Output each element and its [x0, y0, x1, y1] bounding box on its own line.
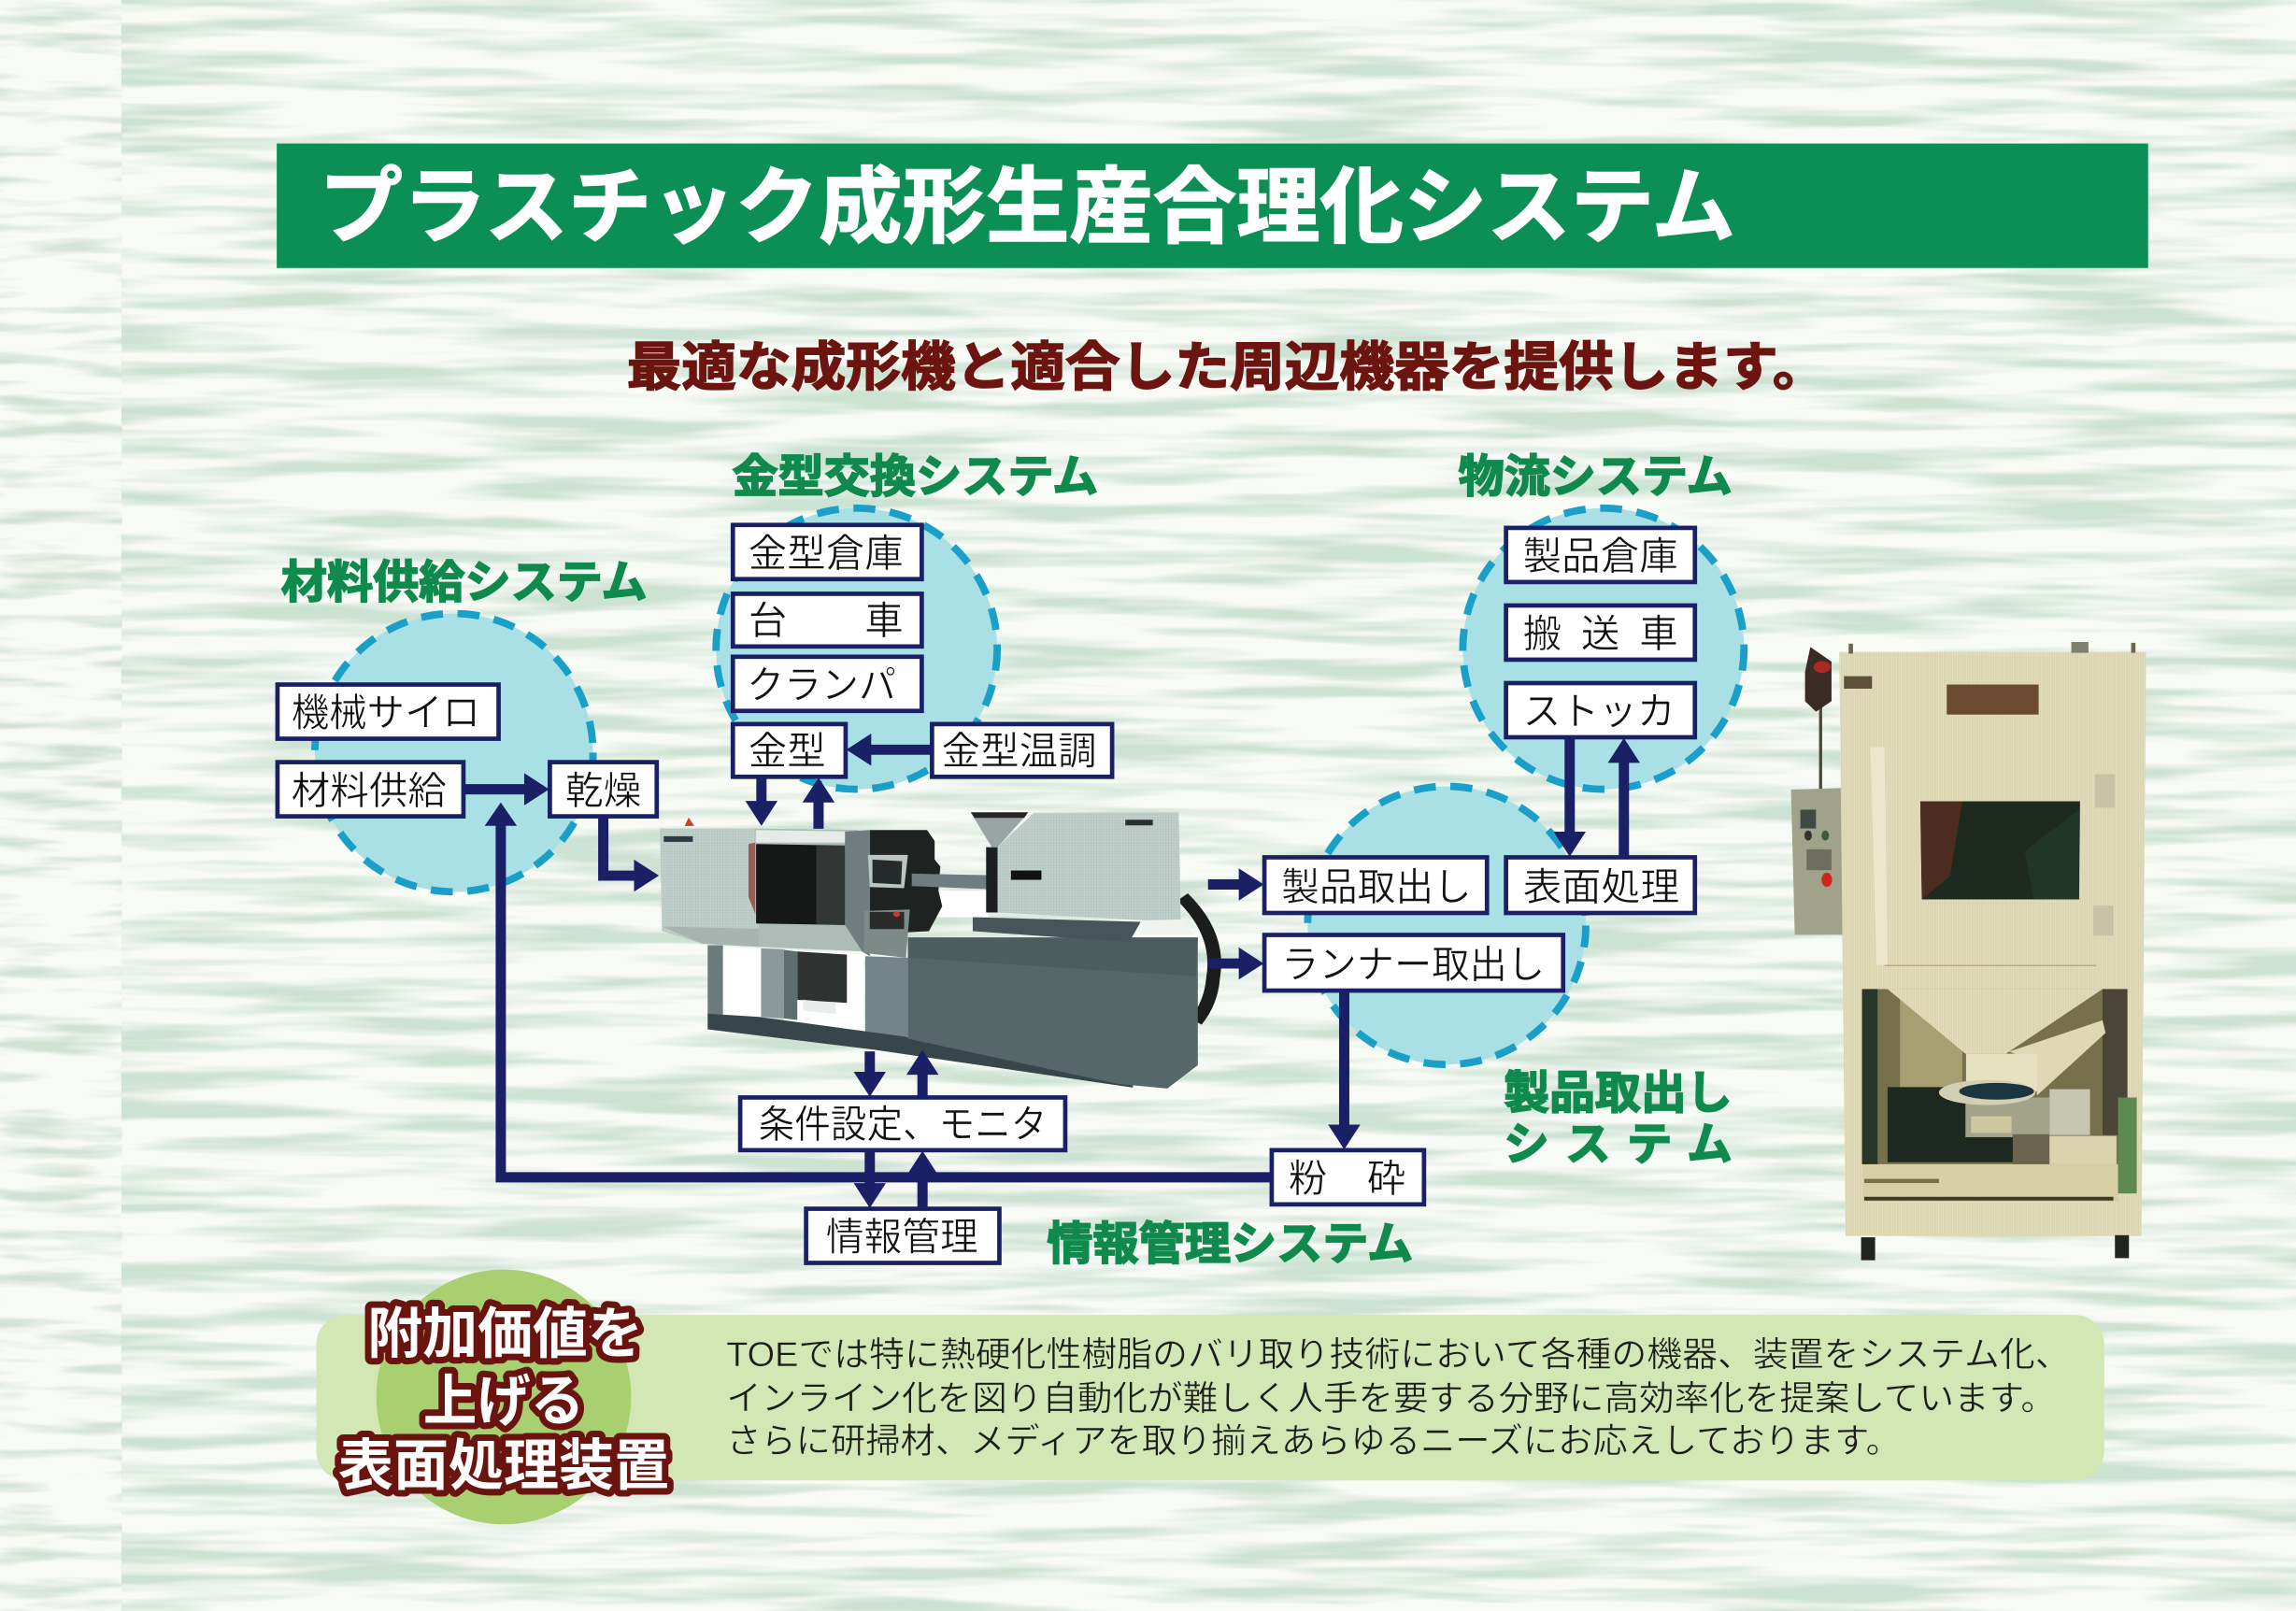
box: 情報管理: 情報管理 [826, 1215, 978, 1259]
box: 情報管理 [806, 1209, 999, 1263]
box: クランパ: クランパ [747, 663, 896, 706]
arrow: machine to runner removal [1208, 948, 1263, 979]
box: 金型 [733, 724, 846, 777]
arrow: material supply to dryer [464, 773, 549, 806]
arrow: mold temperature controller to mold [847, 734, 932, 766]
icon: injection moulding machine photo [660, 812, 1215, 1089]
title bar [277, 144, 2148, 268]
arrow: condition settings to information management [854, 1151, 886, 1208]
box: 表面処理 [1506, 857, 1695, 913]
box: 乾燥: 乾燥 [565, 768, 641, 812]
heading: 金型交換システム: 金型交換システム [732, 452, 1098, 503]
panel: description [316, 1315, 2104, 1480]
box: ストッカ [1506, 683, 1695, 737]
arrow: machine to mold [803, 777, 834, 829]
heading: 製品取出しシステム [1504, 1068, 1733, 1170]
title bar: プラスチック成形生産合理化システム [320, 160, 1735, 253]
callout: 附加価値を上げる表面処理装置: 附加価値を [367, 1303, 643, 1365]
arrow: dryer to machine [604, 817, 659, 891]
arrow: feedback from crusher to material supply [485, 803, 1271, 1177]
box: 条件設定、モニタ: 条件設定、モニタ [759, 1103, 1047, 1147]
arrow: condition settings to machine [906, 1050, 938, 1097]
box: ストッカ: ストッカ [1523, 690, 1676, 734]
text block: description: TOEでは特に熱硬化性樹脂のバリ取り技術において各種の機器、装置をシステム化、 [726, 1335, 2071, 1374]
box: 搬送車: 搬 送 車 [1523, 612, 1678, 656]
circle: material supply [315, 614, 593, 891]
circle: product removal [1307, 786, 1586, 1064]
box: 材料供給 [278, 763, 463, 817]
arrow: machine to product removal [1208, 868, 1263, 901]
subtitle: 最適な成形機と適合した周辺機器を提供します。 [627, 337, 1828, 396]
box: 金型倉庫 [733, 525, 921, 579]
box: 搬送車 [1506, 606, 1695, 660]
box: 台車: 台 車 [749, 599, 904, 643]
callout: 附加価値を上げる表面処理装置: 表面処理装置 [338, 1434, 669, 1497]
box: 製品倉庫 [1506, 528, 1695, 582]
arrow: stocker to surface treatment [1554, 738, 1586, 857]
arrow: information management to condition settings [906, 1151, 938, 1208]
icon: green circle [377, 1270, 631, 1524]
heading: 製品取出しシステム: 製品取出し [1504, 1068, 1733, 1119]
arrow: runner removal to crusher [1328, 991, 1361, 1149]
circle: logistics [1462, 508, 1744, 790]
box: 金型: 金型 [749, 729, 826, 773]
box: 金型温調: 金型温調 [942, 729, 1097, 773]
arrow: surface treatment to stocker [1608, 738, 1640, 857]
box: 製品取出し [1264, 857, 1487, 913]
box: 表面処理: 表面処理 [1523, 865, 1679, 909]
arrow: machine to condition settings [854, 1051, 886, 1097]
box: 台車 [733, 593, 921, 647]
arrow: mold to machine [746, 777, 777, 826]
box: 金型倉庫: 金型倉庫 [749, 531, 904, 575]
heading: 情報管理システム: 情報管理システム [1047, 1219, 1413, 1270]
text block: description: インライン化を図り自動化が難しく人手を要する分野に高効率化を提案しています。 [726, 1379, 2056, 1418]
text block: description: さらに研掃材、メディアを取り揃えあらゆるニーズにお応えしております。 [726, 1421, 1901, 1460]
box: 製品取出し: 製品取出し [1281, 865, 1472, 909]
box: ランナー取出し: ランナー取出し [1281, 943, 1545, 987]
box: 機械サイロ: 機械サイロ [292, 691, 480, 734]
circle: mold exchange [716, 508, 997, 790]
icon: surface treatment machine photo [1791, 642, 2146, 1261]
heading: 物流システム: 物流システム [1459, 452, 1733, 503]
box: クランパ [733, 657, 921, 711]
heading: 製品取出しシステム: システム [1504, 1119, 1733, 1170]
box: 粉砕 [1272, 1150, 1424, 1205]
heading: 材料供給システム: 材料供給システム [281, 557, 648, 607]
callout: 附加価値を上げる表面処理装置: 上げる [423, 1370, 584, 1433]
box: 乾燥 [549, 763, 657, 817]
text block: description [726, 1335, 2071, 1460]
callout: 附加価値を上げる表面処理装置 [338, 1303, 669, 1497]
box: 粉砕: 粉 砕 [1289, 1157, 1405, 1201]
box: 材料供給: 材料供給 [292, 768, 447, 812]
box: 製品倉庫: 製品倉庫 [1523, 535, 1678, 578]
